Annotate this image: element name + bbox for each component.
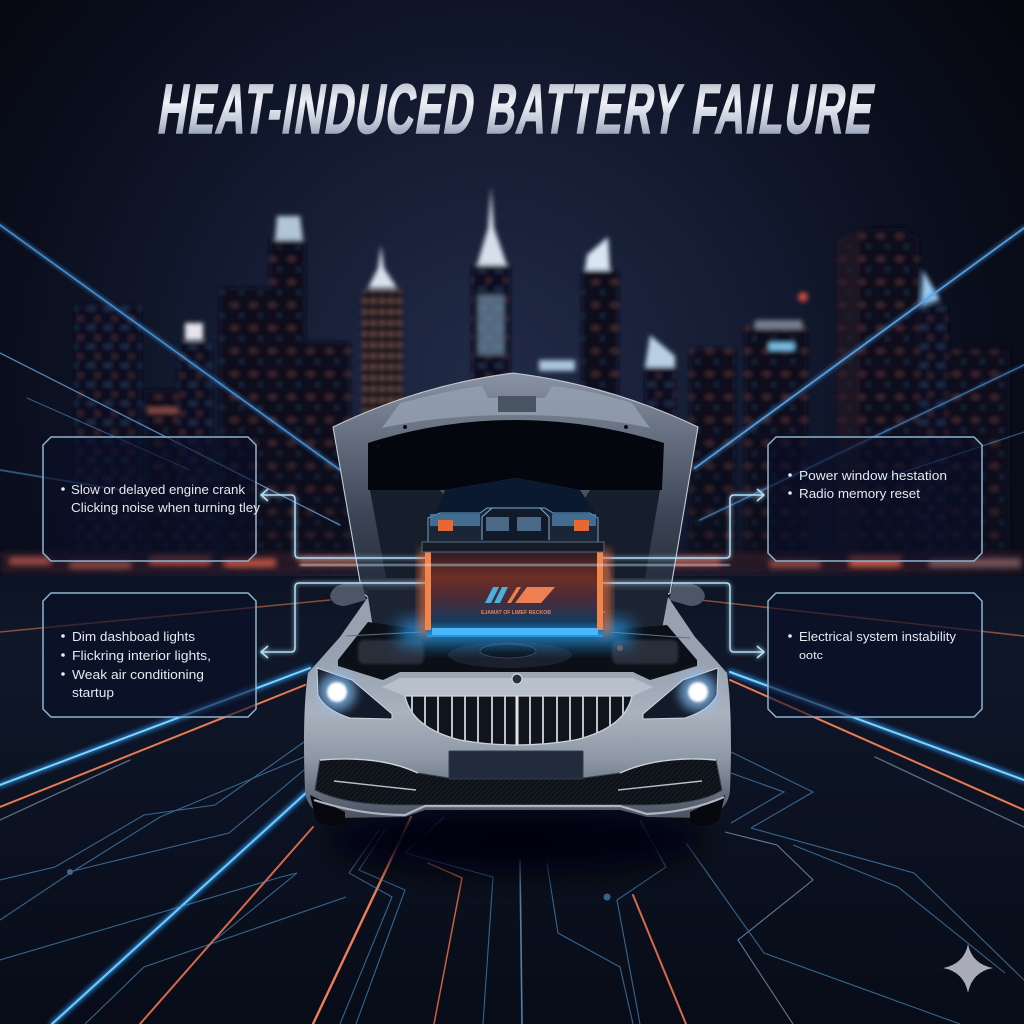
road surface [0,576,1024,1024]
skyline lower haze [0,420,1024,570]
car body [304,597,731,818]
lower bumper intake [315,759,722,805]
panel: dim lights: Weak air conditioning [72,668,204,682]
title: HEAT-INDUCED BATTERY FAILURE [153,71,879,149]
battery label: EJAMAT OF LIMEF RECKOB [481,610,551,616]
icon: sparkle [943,944,993,993]
panel: window and radio: Power window hestation [799,469,947,483]
arrow to electrical panel [603,583,764,658]
battery lid [422,508,604,552]
battery logo stripes [485,587,555,603]
side mirrors [330,583,705,606]
panel: dim lights: startup [72,686,114,700]
panel: dim lights: Dim dashboad lights [72,630,195,644]
horizon city lights [0,552,1024,574]
battery glow [400,550,630,644]
sedan car with open hood [304,373,731,825]
license plate [449,751,583,779]
emblem [512,674,522,684]
upper light beams [0,225,1024,525]
battery light flare [300,564,730,566]
panel: slow crank: Clicking noise when turning tley [71,501,261,515]
panel: electrical instability [768,593,982,717]
panel: dim lights: Flickring interior lights, [72,649,211,663]
car battery [300,508,730,644]
panel: electrical instability: ootc [799,650,824,662]
tires [310,795,725,825]
panel: slow crank [43,437,261,561]
left headlight [317,668,392,719]
right headlight [643,668,718,719]
panel: dim lights [43,593,256,717]
bottom lip [314,797,724,815]
windshield base [367,590,668,632]
nose panel [382,678,653,696]
arrow to slow crank panel [261,489,425,558]
arrow to dim lights panel [261,583,425,658]
circuit traces on road [0,742,1024,1024]
panel: slow crank: Slow or delayed engine crank [71,483,246,497]
panel: window and radio [768,437,982,561]
arrow to window panel [600,489,764,558]
road light streaks [0,600,1024,1024]
battery side edges [425,552,603,635]
connector lines and arrows [261,489,764,658]
city skyline [75,187,1010,570]
engine bay [338,622,697,680]
grille [405,696,632,750]
shadow under car [326,808,706,872]
battery case [427,551,603,637]
panel: electrical instability: Electrical system instability [799,630,957,644]
raised hood [333,373,698,612]
panel: window and radio: Radio memory reset [799,487,921,501]
